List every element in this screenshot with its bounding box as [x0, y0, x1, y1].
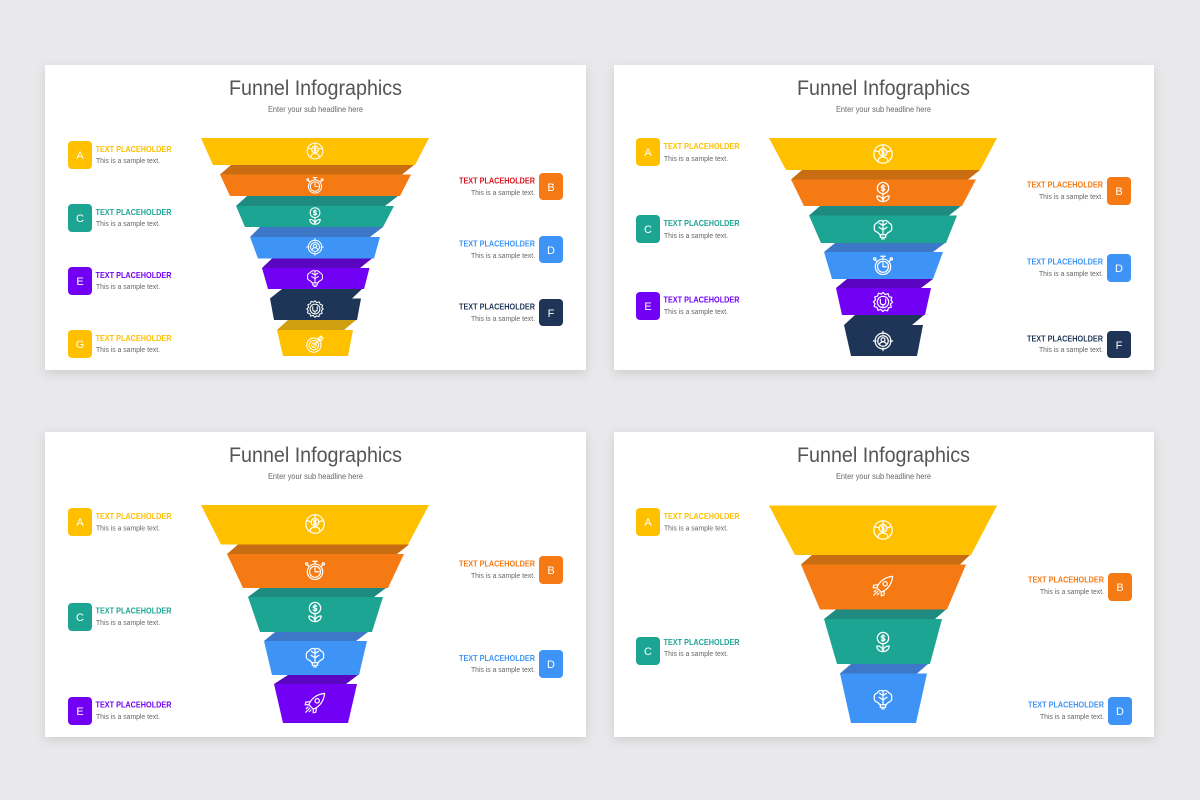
level D: [250, 227, 383, 258]
label D: D: [1115, 263, 1123, 275]
funnel chart: [769, 138, 997, 356]
label D: TEXT PLACEHOLDER: [459, 653, 535, 663]
label B: TEXT PLACEHOLDER: [1027, 180, 1103, 190]
label A: TEXT PLACEHOLDER: [96, 511, 172, 521]
level C: [236, 196, 398, 227]
label A: TEXT PLACEHOLDER: [96, 144, 172, 154]
icon: rocket: [305, 693, 325, 713]
subtitle: Enter your sub headline here: [268, 105, 363, 114]
label D: This is a sample text.: [471, 665, 535, 674]
label A: A: [76, 517, 84, 529]
label E: [68, 697, 172, 725]
label C: This is a sample text.: [96, 618, 160, 627]
icon: stopwatch: [307, 178, 323, 193]
icon: coin person: [307, 143, 323, 159]
funnel chart: [769, 506, 997, 723]
funnel chart: [201, 505, 429, 723]
label E: [68, 267, 172, 295]
label A: [636, 508, 740, 536]
label F: F: [548, 308, 555, 320]
icon: dart target: [307, 336, 323, 352]
label D: This is a sample text.: [1039, 269, 1103, 278]
level F: [270, 289, 362, 320]
label C: C: [644, 224, 652, 236]
label F: TEXT PLACEHOLDER: [1027, 334, 1103, 344]
label C: C: [76, 213, 84, 225]
label E: E: [76, 276, 84, 288]
subtitle: Enter your sub headline here: [836, 105, 931, 114]
label E: This is a sample text.: [664, 307, 728, 316]
label A: This is a sample text.: [96, 524, 160, 532]
label C: TEXT PLACEHOLDER: [96, 606, 172, 616]
icon: money plant: [877, 182, 889, 202]
level E: [836, 279, 933, 315]
label B: This is a sample text.: [1039, 192, 1103, 201]
panel: funnel with six levels: [614, 65, 1154, 370]
label G: TEXT PLACEHOLDER: [96, 333, 172, 343]
level D: [840, 664, 928, 723]
label E: [636, 292, 740, 320]
label D: D: [1116, 706, 1124, 718]
label D: TEXT PLACEHOLDER: [1028, 700, 1104, 710]
level C: [809, 206, 961, 243]
level A: [201, 138, 429, 165]
icon: target person: [307, 239, 323, 255]
icon: brain bulb: [874, 221, 892, 239]
label B: [459, 556, 563, 584]
label A: TEXT PLACEHOLDER: [664, 511, 740, 521]
level B: [220, 165, 414, 196]
label E: E: [644, 301, 652, 313]
icon: target person: [873, 331, 893, 351]
label F: [1027, 331, 1131, 358]
label D: [1027, 254, 1131, 282]
label E: This is a sample text.: [96, 282, 160, 291]
icon: coin person: [874, 145, 892, 163]
level B: [801, 555, 970, 610]
icon: rocket: [873, 576, 893, 596]
level C: [824, 610, 946, 664]
label B: [1028, 573, 1132, 601]
icon: stopwatch: [874, 256, 892, 274]
label D: D: [547, 245, 555, 257]
level B: [227, 544, 409, 588]
level E: [262, 258, 372, 289]
level D: [264, 632, 368, 675]
label C: C: [644, 646, 652, 658]
level A: [201, 505, 429, 544]
label C: This is a sample text.: [96, 219, 160, 228]
label A: This is a sample text.: [96, 156, 160, 165]
subtitle: Enter your sub headline here: [836, 472, 931, 481]
label C: [636, 637, 740, 665]
label G: This is a sample text.: [96, 345, 160, 354]
label D: TEXT PLACEHOLDER: [459, 238, 535, 248]
level D: [824, 243, 945, 279]
label B: TEXT PLACEHOLDER: [1028, 574, 1104, 584]
label C: This is a sample text.: [664, 649, 728, 658]
label B: TEXT PLACEHOLDER: [459, 558, 535, 568]
label E: TEXT PLACEHOLDER: [96, 700, 172, 710]
level B: [791, 170, 980, 206]
label A: This is a sample text.: [664, 524, 728, 532]
label D: This is a sample text.: [1040, 712, 1104, 721]
label F: [459, 299, 563, 326]
label B: B: [547, 565, 555, 577]
label A: [68, 508, 172, 536]
icon: gear: [873, 292, 893, 312]
label C: [68, 603, 172, 631]
label F: F: [1116, 340, 1123, 352]
label A: A: [644, 147, 652, 159]
label B: This is a sample text.: [471, 571, 535, 580]
label D: This is a sample text.: [471, 251, 535, 260]
level A: [769, 506, 997, 555]
panel: funnel with seven levels: [45, 65, 586, 370]
label C: [68, 204, 172, 232]
label E: E: [76, 706, 84, 718]
label B: [459, 173, 563, 200]
level A: [769, 138, 997, 170]
subtitle: Enter your sub headline here: [268, 472, 363, 481]
funnel chart: [201, 138, 429, 356]
label A: A: [76, 150, 84, 162]
label E: This is a sample text.: [96, 712, 160, 721]
title: Funnel Infographics: [797, 77, 970, 100]
label C: TEXT PLACEHOLDER: [664, 218, 740, 228]
icon: money plant: [309, 602, 321, 622]
icon: brain bulb: [308, 271, 322, 286]
icon: gear: [307, 301, 323, 317]
icon: coin person: [306, 515, 324, 533]
label D: [459, 236, 563, 263]
level F: [844, 315, 924, 356]
label D: [459, 650, 563, 678]
icon: stopwatch: [306, 561, 324, 579]
label E: TEXT PLACEHOLDER: [664, 294, 740, 304]
label B: TEXT PLACEHOLDER: [459, 176, 535, 186]
label B: B: [1116, 582, 1124, 594]
label B: This is a sample text.: [1040, 587, 1104, 596]
label B: B: [547, 182, 555, 194]
label C: TEXT PLACEHOLDER: [664, 637, 740, 647]
label F: TEXT PLACEHOLDER: [459, 302, 535, 312]
label C: [636, 215, 740, 243]
icon: brain bulb: [874, 691, 892, 709]
icon: money plant: [310, 208, 320, 224]
icon: coin person: [874, 521, 892, 539]
title: Funnel Infographics: [229, 444, 402, 467]
label G: [68, 330, 172, 358]
title: Funnel Infographics: [229, 77, 402, 100]
label G: G: [76, 339, 84, 351]
label F: This is a sample text.: [471, 314, 535, 323]
label A: A: [644, 517, 652, 529]
label B: [1027, 177, 1131, 205]
label F: This is a sample text.: [1039, 345, 1103, 354]
panel: funnel with four levels: [614, 432, 1154, 737]
level G: [277, 320, 356, 356]
label D: [1028, 697, 1132, 725]
label E: TEXT PLACEHOLDER: [96, 270, 172, 280]
label C: This is a sample text.: [664, 231, 728, 240]
label A: [68, 141, 172, 169]
level C: [248, 588, 386, 632]
level E: [274, 675, 358, 723]
label B: B: [1115, 186, 1123, 198]
icon: brain bulb: [306, 649, 324, 667]
title: Funnel Infographics: [797, 444, 970, 467]
icon: money plant: [877, 632, 889, 652]
label C: TEXT PLACEHOLDER: [96, 207, 172, 217]
panel: funnel with five levels: [45, 432, 586, 737]
label A: This is a sample text.: [664, 154, 728, 163]
label A: TEXT PLACEHOLDER: [664, 141, 740, 151]
label A: [636, 138, 740, 166]
label B: This is a sample text.: [471, 188, 535, 197]
label D: TEXT PLACEHOLDER: [1027, 256, 1103, 266]
label D: D: [547, 659, 555, 671]
label C: C: [76, 612, 84, 624]
